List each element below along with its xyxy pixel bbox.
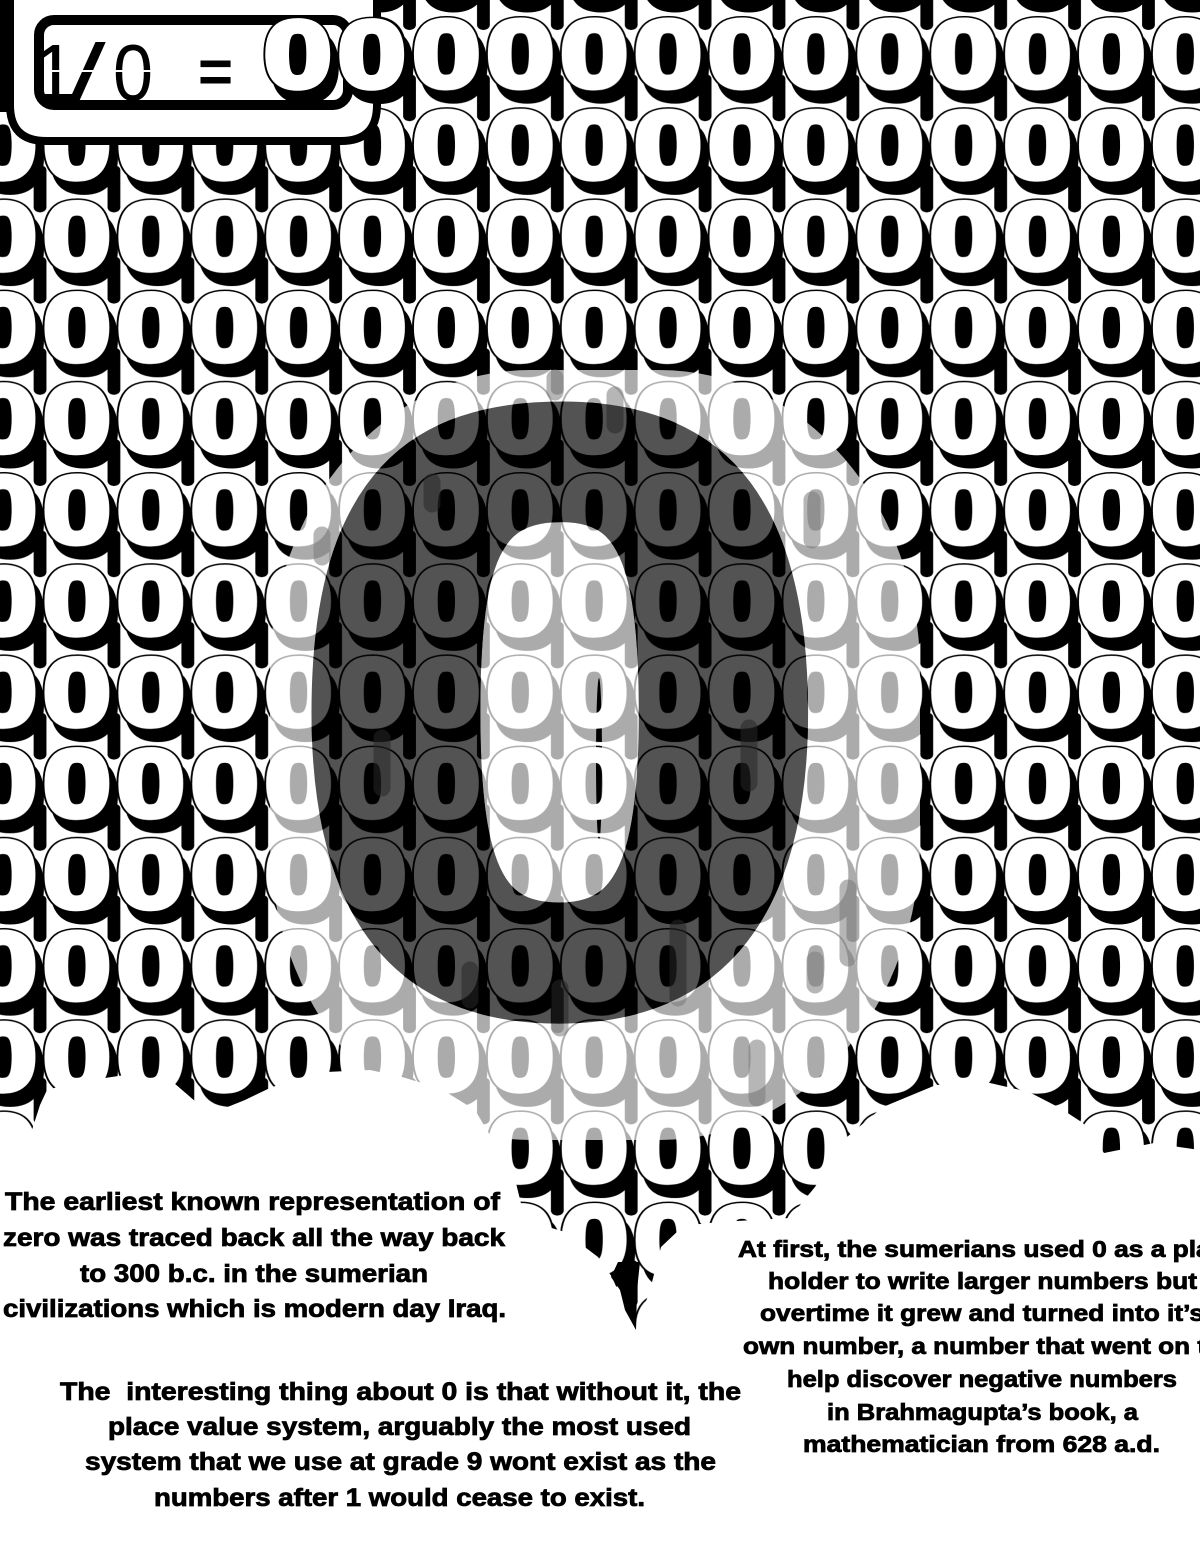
calculator display (39, 20, 348, 105)
big zero: 0 (291, 244, 830, 1177)
text: sumerians place holder: help discover negative numbers (787, 1366, 1177, 1392)
digit one on display: 1 (32, 28, 76, 117)
text: sumerians place holder: holder to write larger numbers but (768, 1268, 1197, 1294)
text: sumerians place holder: overtime it grew and turned into it’s (760, 1300, 1200, 1326)
text: earliest representation (3, 1188, 506, 1323)
result zeros: 00 (264, 2, 406, 108)
text: place value system: numbers after 1 would cease to exist. (154, 1484, 645, 1512)
text: place value system: The interesting thing about 0 is that without it, the (60, 1378, 741, 1406)
text: sumerians place holder: own number, a number that went on to (743, 1333, 1200, 1359)
text: sumerians place holder: At first, the sumerians used 0 as a place (738, 1236, 1200, 1262)
text: sumerians place holder: mathematician from 628 a.d. (803, 1431, 1160, 1457)
equals sign: = (198, 38, 233, 105)
digit zero on display: 0 (113, 29, 153, 118)
black drip tip (611, 1262, 640, 1330)
text: place value system: system that we use at grade 9 wont exist as the (85, 1448, 716, 1476)
calculator left edge (0, 0, 10, 112)
calculator body (10, 0, 377, 141)
white clouds behind text (0, 1070, 1200, 1553)
big zero light shadow (270, 370, 920, 1140)
big zero drips (322, 378, 848, 1098)
text: place value system (60, 1378, 741, 1512)
text: earliest representation: The earliest known representation of (5, 1188, 501, 1216)
text: earliest representation: to 300 b.c. in the sumerian (80, 1260, 428, 1288)
text: sumerians place holder: in Brahmagupta’s book, a (827, 1399, 1138, 1425)
text: place value system: place value system, arguably the most used (108, 1413, 691, 1441)
text: earliest representation: zero was traced back all the way back (3, 1224, 505, 1252)
result zeros: 00 (271, 14, 413, 120)
result zeros: 00 (264, 2, 406, 108)
slash on display: / (69, 28, 106, 118)
text: sumerians place holder (738, 1236, 1200, 1457)
text: earliest representation: civilizations which is modern day Iraq. (3, 1295, 506, 1323)
